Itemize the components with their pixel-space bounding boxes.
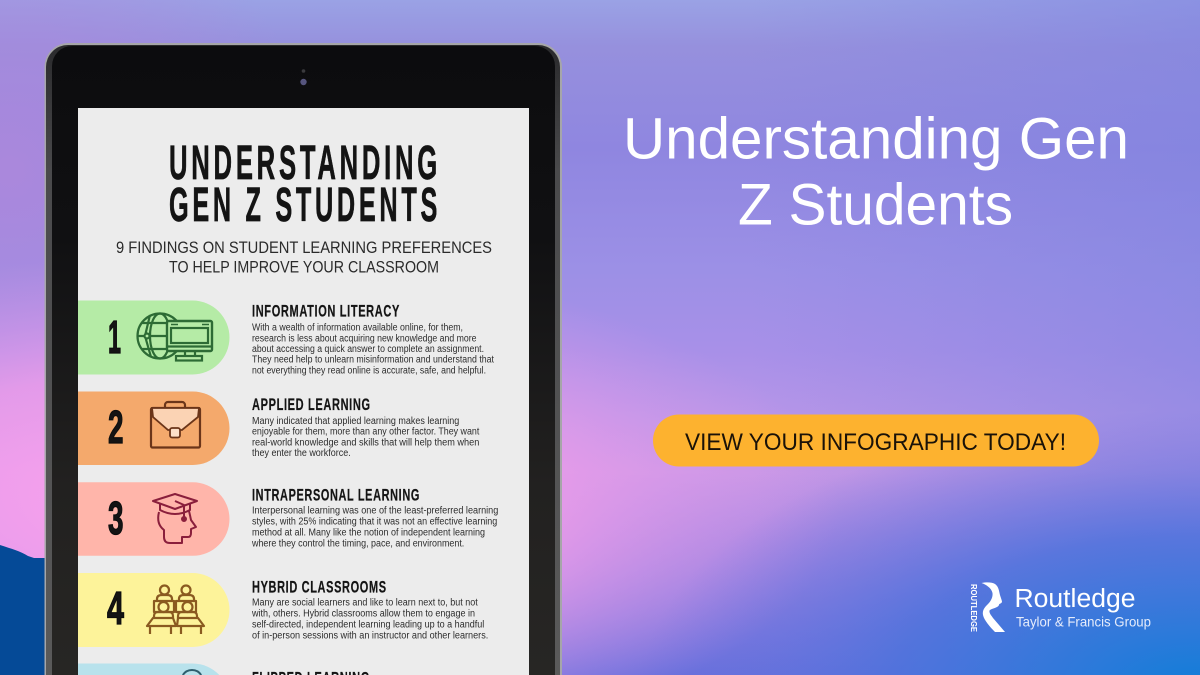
finding 4 text: with, others. Hybrid classrooms allow them to engage in xyxy=(251,609,475,620)
logo: Routledge wordmark: Routledge xyxy=(1014,585,1136,613)
pill 4 xyxy=(78,573,230,647)
finding 2 text: enjoyable for them, more than any other factor. They want xyxy=(252,427,479,438)
infographic title xyxy=(170,145,437,222)
number 1: 1 xyxy=(108,311,121,363)
finding 2 text xyxy=(252,395,479,459)
finding 1 text xyxy=(252,302,494,376)
infographic subtitle: 9 FINDINGS ON STUDENT LEARNING PREFERENCES xyxy=(116,239,492,257)
number 2: 2 xyxy=(108,401,124,453)
pill 3 xyxy=(78,482,230,556)
tablet device xyxy=(30,43,562,675)
main headline xyxy=(623,106,1129,237)
finding 3 text: styles, with 25% indicating that it was not an effective learning xyxy=(252,517,497,528)
finding 3 text: method at all. Many like the notion of independent learning xyxy=(252,528,485,539)
main headline: Understanding Gen xyxy=(623,106,1129,171)
finding 2 text: real-world knowledge and skills that will help them when xyxy=(252,437,479,448)
finding 2 text: Many indicated that applied learning makes learning xyxy=(252,416,459,427)
finding 3: intrapersonal learning xyxy=(78,482,230,556)
finding 1 text: With a wealth of information available online, for them, xyxy=(252,323,463,334)
finding 4 text: HYBRID CLASSROOMS xyxy=(252,577,387,596)
finding 3 text: INTRAPERSONAL LEARNING xyxy=(252,486,420,505)
Routledge logo xyxy=(969,582,1151,633)
tablet frame xyxy=(44,43,562,675)
call-to-action button xyxy=(653,414,1099,466)
finding 3 text: where they control the timing, pace, and environment. xyxy=(251,538,464,549)
logo: vertical wordmark: ROUTLEDGE xyxy=(969,584,978,633)
finding 1 text: not everything they read online is accurate, safe, and helpful. xyxy=(252,365,486,376)
icon: briefcase xyxy=(151,402,200,448)
finding 1 text: about accessing a quick answer to complete an assignment. xyxy=(252,344,484,355)
front camera xyxy=(300,69,307,85)
finding 4 text xyxy=(251,577,488,642)
finding 5: flipped learning (cropped) xyxy=(78,664,370,675)
number 4: 4 xyxy=(107,582,124,634)
finding 4 text: of in-person sessions with an instructor and other learners. xyxy=(252,631,488,642)
finding 4 text: Many are social learners and like to learn next to, but not xyxy=(252,598,478,609)
main headline: Z Students xyxy=(738,172,1013,237)
logo: R silhouette xyxy=(982,582,1005,632)
pill 2 xyxy=(78,392,230,465)
icon: globe and monitor xyxy=(138,314,212,360)
pill 1 xyxy=(78,300,230,374)
infographic subtitle xyxy=(116,242,492,272)
infographic title: UNDERSTANDING xyxy=(169,137,441,190)
finding 3 text: Interpersonal learning was one of the least-preferred learning xyxy=(252,506,498,517)
icon: circle top xyxy=(183,670,201,675)
tablet bezel xyxy=(52,46,555,675)
icon: classroom desks xyxy=(147,586,204,634)
pill 5 xyxy=(78,664,219,675)
finding 1 text: They need help to unlearn misinformation and understand that xyxy=(252,355,494,366)
finding 1 text: research is less about acquiring new knowledge and more xyxy=(252,333,477,344)
icon: graduate head xyxy=(153,494,197,543)
finding 3 text xyxy=(251,486,498,549)
finding 2 text: they enter the workforce. xyxy=(252,448,351,459)
finding 2 text: APPLIED LEARNING xyxy=(252,395,371,414)
finding 1: information literacy xyxy=(78,300,230,374)
finding 4 text: self-directed, independent learning leading up to a handful xyxy=(252,620,484,631)
mountain silhouette, left edge xyxy=(0,545,50,675)
call-to-action button: VIEW YOUR INFOGRAPHIC TODAY! xyxy=(685,429,1066,456)
tablet side band xyxy=(46,45,560,675)
logo: Taylor and Francis Group: Taylor & Francis Group xyxy=(1016,614,1151,630)
infographic subtitle: TO HELP IMPROVE YOUR CLASSROOM xyxy=(169,258,439,276)
number 3: 3 xyxy=(108,492,124,544)
finding 2: applied learning xyxy=(78,392,230,465)
tablet screen: infographic xyxy=(30,108,529,675)
finding 1 text: INFORMATION LITERACY xyxy=(252,302,400,321)
infographic title: GEN Z STUDENTS xyxy=(169,179,441,232)
finding 4: hybrid classrooms xyxy=(78,573,230,647)
